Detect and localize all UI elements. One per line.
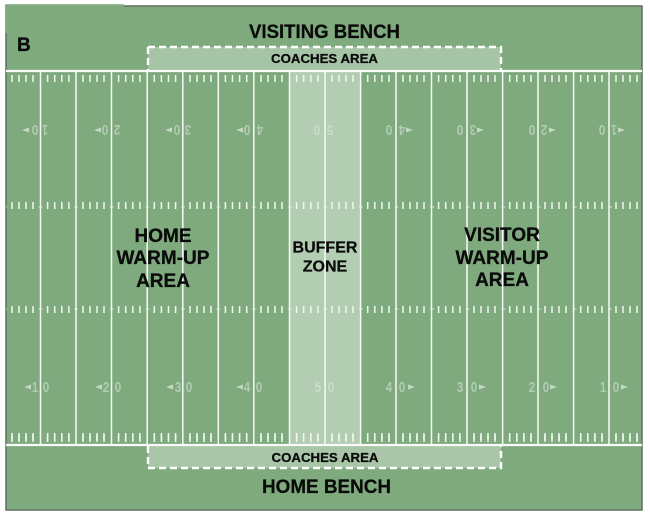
bottom row yard numbers: 4 bbox=[386, 380, 392, 396]
top row yard numbers, inverted: 0 bbox=[386, 121, 392, 137]
top row yard numbers, inverted bbox=[32, 121, 617, 137]
buffer zone label: BUFFER bbox=[293, 240, 358, 256]
top row yard numbers, inverted: 3 bbox=[185, 121, 191, 137]
home warm-up area label: AREA bbox=[136, 271, 190, 292]
visitor warm-up area label: WARM-UP bbox=[456, 248, 549, 269]
top row yard numbers, inverted: 2 bbox=[114, 121, 120, 137]
top row yard numbers, inverted: 0 bbox=[529, 121, 535, 137]
top coaches area bbox=[148, 47, 501, 70]
visitor warm-up area label bbox=[456, 225, 549, 291]
bottom row arrows bbox=[24, 384, 628, 390]
bottom row yard numbers: 0 bbox=[613, 380, 619, 396]
bottom row yard numbers: 3 bbox=[457, 380, 463, 396]
visitor warm-up area label: VISITOR bbox=[464, 225, 540, 246]
top row yard numbers, inverted: 0 bbox=[599, 121, 605, 137]
bottom row yard numbers bbox=[32, 380, 619, 396]
bottom row yard numbers: 0 bbox=[471, 380, 477, 396]
top row yard numbers, inverted: 0 bbox=[174, 121, 180, 137]
bottom row yard numbers: 0 bbox=[543, 380, 549, 396]
top row yard numbers, inverted: 0 bbox=[102, 121, 108, 137]
top row yard numbers, inverted: 4 bbox=[257, 121, 263, 137]
home warm-up area label bbox=[117, 226, 210, 292]
bottom row yard numbers: 2 bbox=[103, 380, 109, 396]
top row yard numbers, inverted: 2 bbox=[541, 121, 547, 137]
bottom row yard numbers: 0 bbox=[43, 380, 49, 396]
buffer zone label: ZONE bbox=[303, 258, 348, 276]
bottom coaches area label: COACHES AREA bbox=[272, 451, 378, 465]
top row yard numbers, inverted: 0 bbox=[457, 121, 463, 137]
buffer zone label bbox=[293, 240, 358, 276]
bottom row yard numbers: 0 bbox=[399, 380, 405, 396]
hash marks bbox=[6, 75, 642, 442]
home warm-up area label: HOME bbox=[134, 226, 192, 247]
home bench label: HOME BENCH bbox=[262, 477, 391, 498]
buffer zone band bbox=[290, 71, 360, 445]
bottom row yard numbers: 0 bbox=[115, 380, 121, 396]
top row yard numbers, inverted: 4 bbox=[399, 121, 405, 137]
top coaches area label: COACHES AREA bbox=[271, 52, 378, 66]
panel label B: B bbox=[17, 35, 31, 56]
bottom row yard numbers: 1 bbox=[32, 380, 38, 396]
top-left notch of the field bbox=[6, 5, 123, 33]
top row yard numbers, inverted: 3 bbox=[470, 121, 476, 137]
top row arrows bbox=[22, 128, 625, 132]
bottom row yard numbers: 5 bbox=[315, 380, 321, 396]
bottom row yard numbers: 0 bbox=[328, 380, 334, 396]
bottom row yard numbers: 3 bbox=[175, 380, 181, 396]
bottom row yard numbers: 0 bbox=[186, 380, 192, 396]
bottom row yard numbers: 1 bbox=[600, 380, 606, 396]
bottom row yard numbers: 2 bbox=[529, 380, 535, 396]
top row yard numbers, inverted: 0 bbox=[244, 121, 250, 137]
top row yard numbers, inverted: 0 bbox=[314, 121, 320, 137]
top row yard numbers, inverted: 1 bbox=[611, 121, 617, 137]
top row yard numbers, inverted: 0 bbox=[32, 121, 38, 137]
visitor warm-up area label: AREA bbox=[475, 270, 529, 291]
visiting bench label: VISITING BENCH bbox=[249, 22, 400, 43]
bottom row yard numbers: 0 bbox=[256, 380, 262, 396]
yard lines bbox=[6, 71, 642, 445]
bottom row yard numbers: 4 bbox=[244, 380, 250, 396]
bottom coaches area bbox=[148, 446, 501, 468]
top row yard numbers, inverted: 1 bbox=[42, 121, 48, 137]
home warm-up area label: WARM-UP bbox=[117, 248, 210, 269]
top row yard numbers, inverted: 5 bbox=[327, 121, 333, 137]
